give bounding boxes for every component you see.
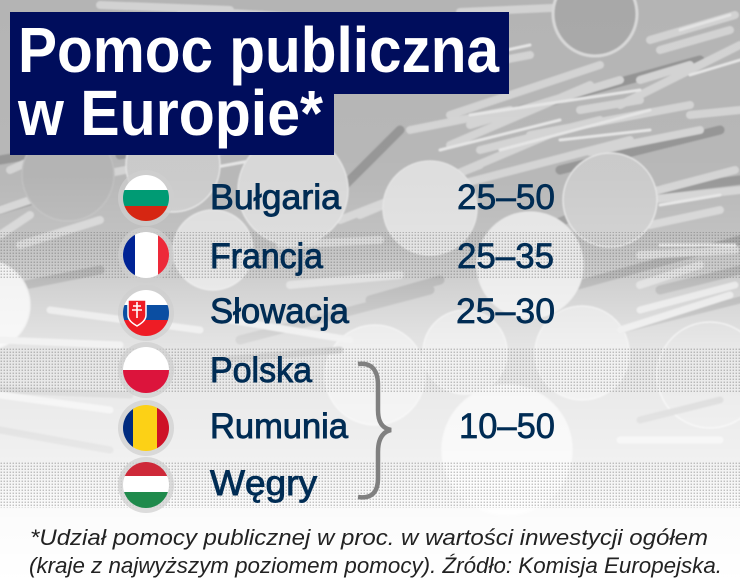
heading line 2: w Europie*: [17, 77, 323, 149]
dotted band 3: [0, 462, 740, 508]
label: Romania: Rumunia: [210, 407, 349, 446]
footnote: [29, 525, 722, 578]
curly brace: [358, 364, 391, 497]
footnote line 2: (kraje z najwyższym poziomem pomocy). Źródło: Komisja Europejska.: [29, 553, 722, 578]
flag: Slovakia: [118, 285, 174, 341]
value: Slovakia: 25–30: [456, 292, 555, 331]
label: Hungary: Węgry: [210, 464, 318, 503]
flag: Poland: [118, 342, 174, 398]
country names: [210, 178, 350, 503]
value: Poland, Romania, Hungary: 10–50: [459, 407, 555, 446]
label: Bulgaria: Bułgaria: [210, 178, 342, 217]
flag: Hungary: [118, 457, 174, 513]
label: France: Francja: [210, 237, 324, 276]
dotted band 1: [0, 232, 740, 278]
flag: France: [118, 227, 174, 283]
flag: Romania: [118, 400, 174, 456]
footnote line 1: *Udział pomocy publicznej w proc. w wartości inwestycji ogółem: [30, 525, 708, 550]
dotted band 2: [0, 347, 740, 393]
label: Poland: Polska: [210, 351, 313, 390]
title panel: [10, 12, 509, 155]
value: France: 25–35: [457, 237, 554, 276]
flag: Bulgaria: [118, 175, 170, 226]
values: [456, 178, 555, 446]
label: Slovakia: Słowacja: [210, 292, 350, 331]
heading line 1: Pomoc publiczna: [18, 14, 499, 86]
value: Bulgaria: 25–50: [457, 178, 555, 217]
